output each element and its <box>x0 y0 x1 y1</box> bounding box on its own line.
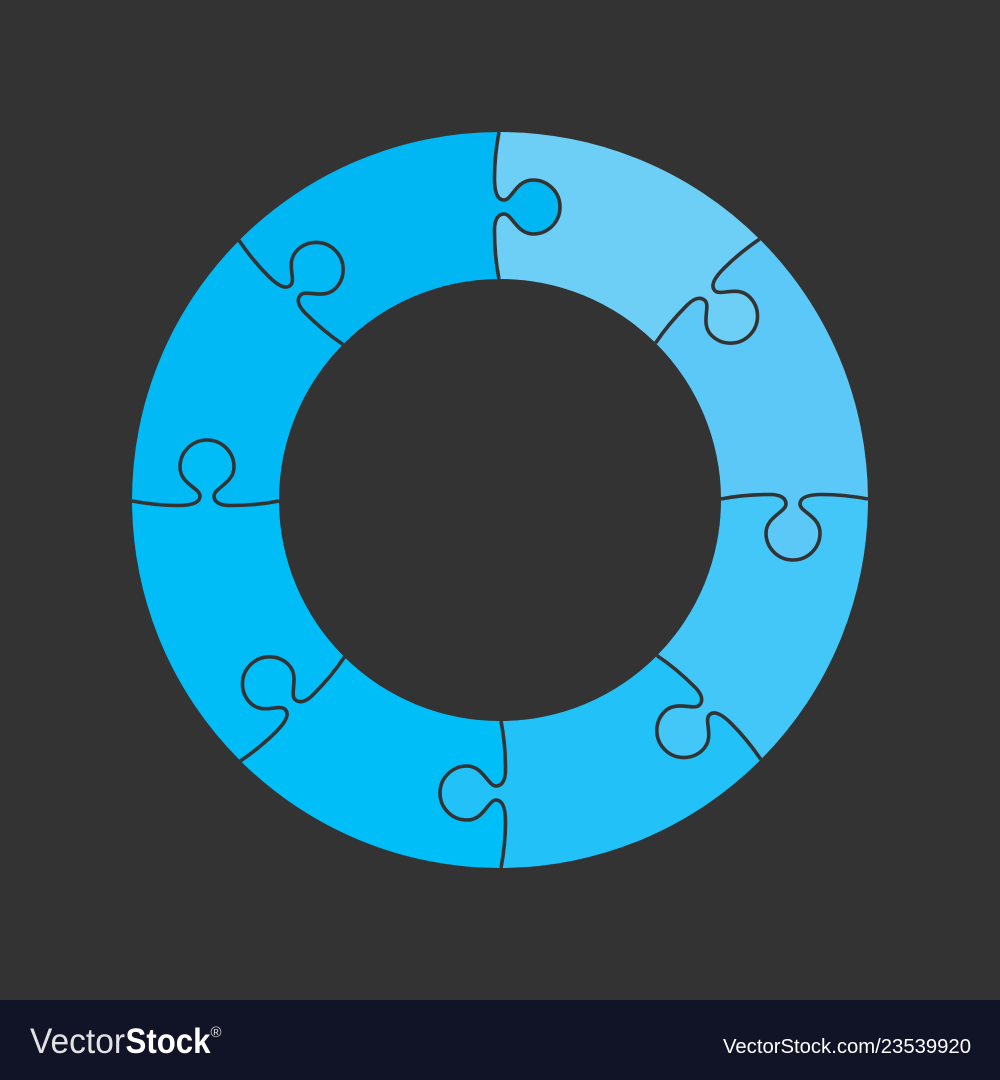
footer logo: Stock <box>126 1022 211 1061</box>
puzzle piece 7: west to north-west <box>132 240 343 506</box>
puzzle piece 6: south-west to west <box>56 428 393 764</box>
footer logo: ® <box>210 1024 222 1041</box>
puzzle ring chart <box>56 56 944 944</box>
puzzle piece 1: top to north-east <box>494 132 760 343</box>
puzzle piece 4: south-east to bottom <box>428 607 764 944</box>
puzzle piece 3: east to south-east <box>657 494 868 760</box>
puzzle piece 5: bottom to south-west <box>240 657 506 868</box>
puzzle piece 8: north-west to top <box>236 56 572 393</box>
seam outlines between puzzle pieces <box>132 132 868 868</box>
footer bar <box>0 1000 1000 1080</box>
footer logo: Vector <box>30 1022 125 1061</box>
puzzle piece 2: north-east to east <box>607 236 944 572</box>
footer image id: VectorStock.com/23539920 <box>723 1036 971 1058</box>
footer logo <box>30 1022 222 1061</box>
